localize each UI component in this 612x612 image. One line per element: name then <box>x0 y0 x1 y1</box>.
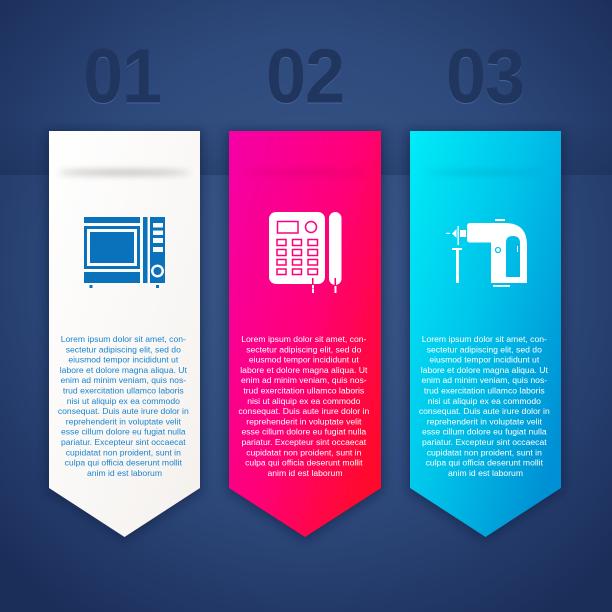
panel 3 text: nisi ut aliquip ex ea commodo <box>428 396 541 406</box>
panel: 02 telephone <box>227 131 383 540</box>
panel 1 text: esse cillum dolore eu fugiat nulla <box>61 427 186 437</box>
icon: telephone <box>269 212 342 293</box>
panel: 01 oven <box>47 131 202 540</box>
panel 2 text: culpa qui officia deserunt mollit <box>245 458 363 468</box>
heading: 01: 01 <box>83 33 161 119</box>
panel 1 text: Lorem ipsum dolor sit amet, con- <box>61 334 186 344</box>
panel 2 text: consequat. Duis aute irure dolor in <box>238 406 369 416</box>
panel 1 text: anim id est laborum <box>87 468 162 478</box>
panel 1 text: nisi ut aliquip ex ea commodo <box>67 396 180 406</box>
panel 1 text: pariatur. Excepteur sint occaecat <box>61 437 186 447</box>
panel: 03 drill <box>408 131 563 540</box>
panel 2 shape <box>229 131 381 537</box>
panel 1 text: enim ad minim veniam, quis nos- <box>60 375 186 385</box>
panel 2 text: sectetur adipiscing elit, sed do <box>246 344 362 354</box>
heading: 02: 02 <box>266 34 344 120</box>
panel 2 fold shadow <box>245 170 365 174</box>
panel 1 text: cupidatat non proident, sunt in <box>66 447 181 457</box>
panel 3 text: anim id est laborum <box>448 468 523 478</box>
heading: 03: 03 <box>446 33 524 119</box>
heading: 02: 02 <box>266 33 344 119</box>
panel 2 text: eiusmod tempor incididunt ut <box>249 355 359 365</box>
panel 3 text: sectetur adipiscing elit, sed do <box>427 344 542 354</box>
panel 2 text: trud exercitation ullamco laboris <box>243 386 364 396</box>
panel 1 text: consequat. Duis aute irure dolor in <box>58 406 189 416</box>
panel 3 text: trud exercitation ullamco laboris <box>424 386 545 396</box>
panel 2 text: anim id est laborum <box>268 468 342 478</box>
icon: oven <box>84 217 165 288</box>
panel 3 text: cupidatat non proident, sunt in <box>427 447 542 457</box>
panel 2 text: reprehenderit in voluptate velit <box>246 416 362 426</box>
panel 3 text: esse cillum dolore eu fugiat nulla <box>422 427 547 437</box>
panel 3 text: reprehenderit in voluptate velit <box>427 416 542 426</box>
panel 1 fold shadow <box>58 170 190 175</box>
panel 2 text: labore et dolore magna aliqua. Ut <box>240 365 368 375</box>
panel 2 text: esse cillum dolore eu fugiat nulla <box>241 427 366 437</box>
panel 3 text: enim ad minim veniam, quis nos- <box>421 375 547 385</box>
panel 3 text: pariatur. Excepteur sint occaecat <box>422 437 547 447</box>
panel 2 text: enim ad minim veniam, quis nos- <box>241 375 367 385</box>
background upper band <box>0 120 612 175</box>
panel 1 text: trud exercitation ullamco laboris <box>63 386 184 396</box>
panel 3 text: labore et dolore magna aliqua. Ut <box>421 365 548 375</box>
panel 2 text: pariatur. Excepteur sint occaecat <box>241 437 367 447</box>
heading: 01: 01 <box>83 34 161 120</box>
icon: drill <box>446 219 527 287</box>
panel 3 shape <box>410 131 561 537</box>
panel 2 text: cupidatat non proident, sunt in <box>246 447 362 457</box>
heading: 03: 03 <box>446 34 524 120</box>
panel 2 text: Lorem ipsum dolor sit amet, con- <box>241 334 367 344</box>
panel 1 text: labore et dolore magna aliqua. Ut <box>60 365 187 375</box>
panel 1 text: reprehenderit in voluptate velit <box>66 416 181 426</box>
panel 3 text: Lorem ipsum dolor sit amet, con- <box>422 334 547 344</box>
panel 2 text: nisi ut aliquip ex ea commodo <box>247 396 361 406</box>
panel 3 text: consequat. Duis aute irure dolor in <box>419 406 550 416</box>
panel 3 text: culpa qui officia deserunt mollit <box>426 458 544 468</box>
panel 1 text: sectetur adipiscing elit, sed do <box>66 344 181 354</box>
panel 1 shape <box>49 131 200 537</box>
panel 1 text: culpa qui officia deserunt mollit <box>65 458 183 468</box>
panel 3 text: eiusmod tempor incididunt ut <box>429 355 540 365</box>
panel 3 fold shadow <box>425 170 545 174</box>
panel 1 text: eiusmod tempor incididunt ut <box>68 355 179 365</box>
